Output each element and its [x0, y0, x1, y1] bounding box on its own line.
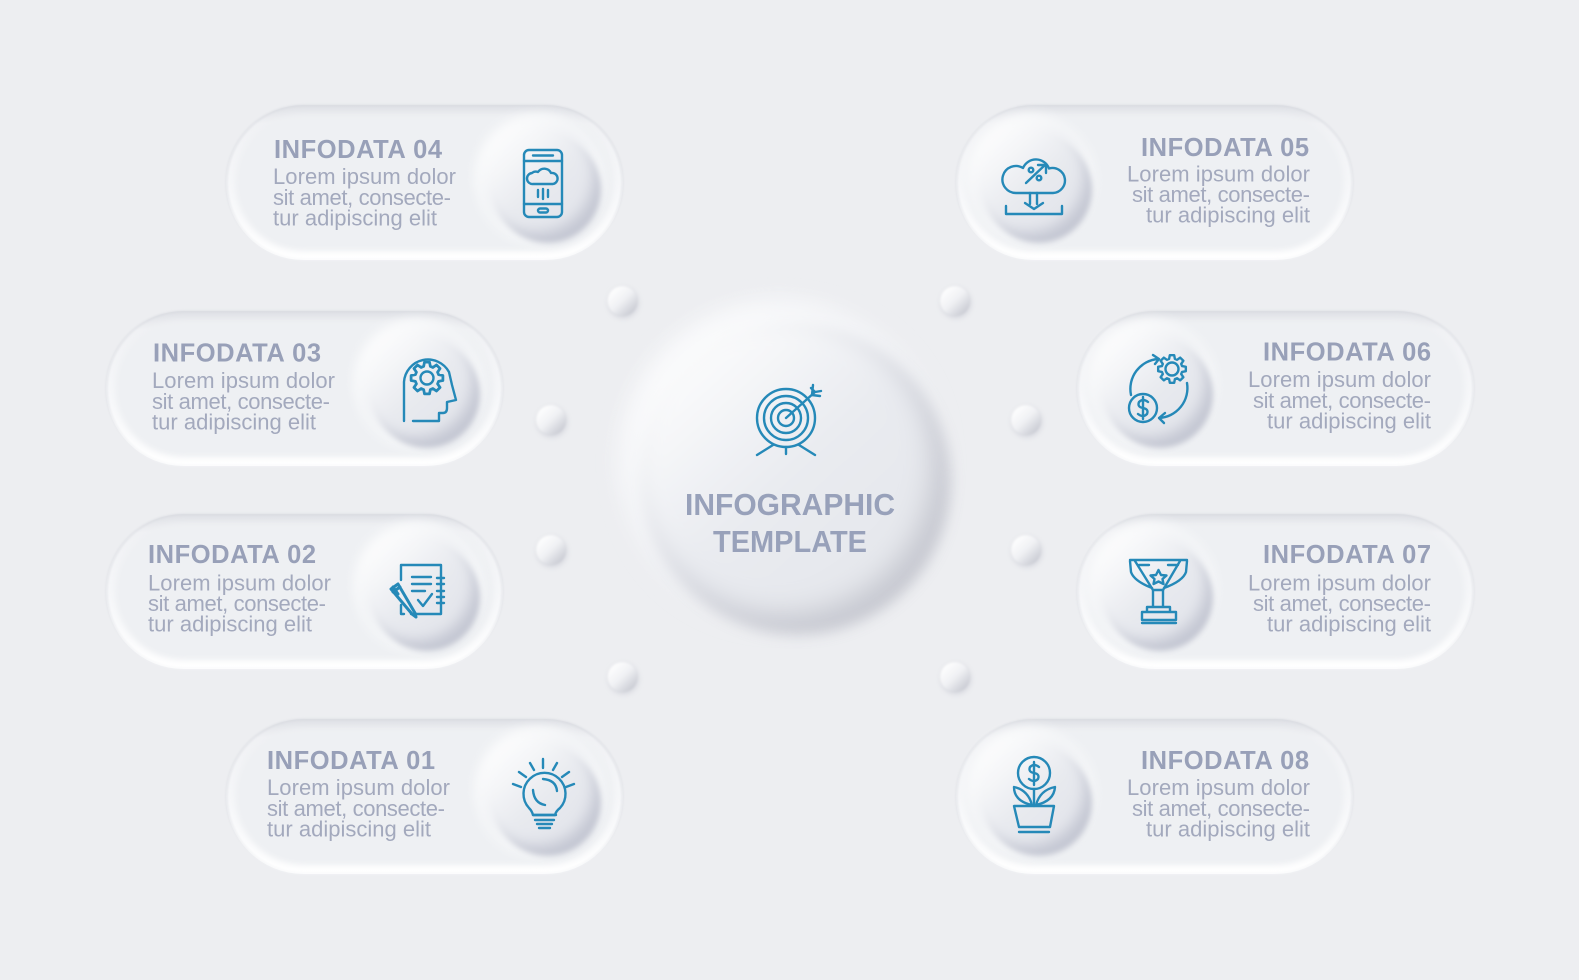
panel: infodata 03: [106, 311, 503, 466]
text 02: sit amet, consecte-: [148, 591, 326, 616]
heading 01: INFODATA 01: [267, 747, 435, 775]
text 06: tur adipiscing elit: [1267, 408, 1431, 434]
connector dots: [536, 286, 1042, 694]
text 02: Lorem ipsum dolor: [148, 570, 331, 596]
text 08: sit amet, consecte-: [1132, 796, 1310, 821]
text 06: [1248, 367, 1431, 434]
text 08: tur adipiscing elit: [1146, 816, 1310, 842]
icon: head with gear: [404, 360, 456, 421]
text 08: Lorem ipsum dolor: [1127, 775, 1310, 800]
text 01: [267, 775, 450, 842]
center title: INFOGRAPHIC: [685, 487, 895, 522]
text 06: sit amet, consecte-: [1253, 388, 1431, 413]
text 03: Lorem ipsum dolor: [152, 368, 335, 393]
panel: infodata 08: [956, 719, 1353, 874]
center sphere: [620, 301, 950, 634]
text 05: Lorem ipsum dolor: [1127, 162, 1310, 186]
heading 03: INFODATA 03: [153, 340, 321, 368]
icon: gear and dollar cycle: [1129, 355, 1187, 423]
panel: infodata 06: [1077, 311, 1474, 466]
text 04: tur adipiscing elit: [273, 206, 437, 230]
text 04: sit amet, consecte-: [273, 185, 451, 210]
heading 05: INFODATA 05: [1141, 134, 1309, 162]
panel: infodata 01: [226, 719, 623, 874]
text 07: [1248, 570, 1431, 636]
panel: infodata 02: [106, 514, 503, 669]
heading 04: INFODATA 04: [274, 136, 443, 164]
text 06: Lorem ipsum dolor: [1248, 367, 1431, 392]
icon: trophy: [1130, 560, 1187, 623]
text 01: Lorem ipsum dolor: [267, 775, 450, 800]
icon: target: [757, 385, 821, 455]
panel: infodata 07: [1077, 514, 1474, 669]
panel: infodata 04: [226, 105, 623, 260]
panel: infodata 05: [956, 105, 1353, 260]
center title: TEMPLATE: [713, 524, 867, 559]
icon: money plant: [1014, 757, 1055, 832]
icon: cloud download: [1002, 159, 1065, 214]
heading 07: INFODATA 07: [1263, 541, 1431, 569]
text 03: sit amet, consecte-: [152, 389, 330, 414]
text 07: sit amet, consecte-: [1253, 591, 1431, 616]
icon: notepad and pen: [391, 565, 444, 617]
text 05: [1127, 162, 1310, 228]
text 08: [1127, 775, 1310, 842]
icon: light bulb: [513, 759, 574, 828]
text 07: tur adipiscing elit: [1267, 612, 1431, 636]
text 05: sit amet, consecte-: [1132, 182, 1310, 207]
text 01: sit amet, consecte-: [267, 796, 445, 821]
text 02: tur adipiscing elit: [148, 612, 312, 636]
text 04: Lorem ipsum dolor: [273, 164, 456, 189]
center title: [685, 487, 895, 559]
text 05: tur adipiscing elit: [1146, 202, 1310, 228]
heading 08: INFODATA 08: [1141, 747, 1309, 775]
heading 06: INFODATA 06: [1263, 338, 1431, 366]
text 02: [148, 570, 331, 636]
heading 02: INFODATA 02: [148, 541, 316, 569]
text 01: tur adipiscing elit: [267, 816, 431, 842]
text 03: [152, 368, 335, 434]
text 07: Lorem ipsum dolor: [1248, 570, 1431, 596]
text 03: tur adipiscing elit: [152, 410, 316, 434]
text 04: [273, 164, 456, 230]
icon: phone with cloud: [524, 150, 562, 217]
